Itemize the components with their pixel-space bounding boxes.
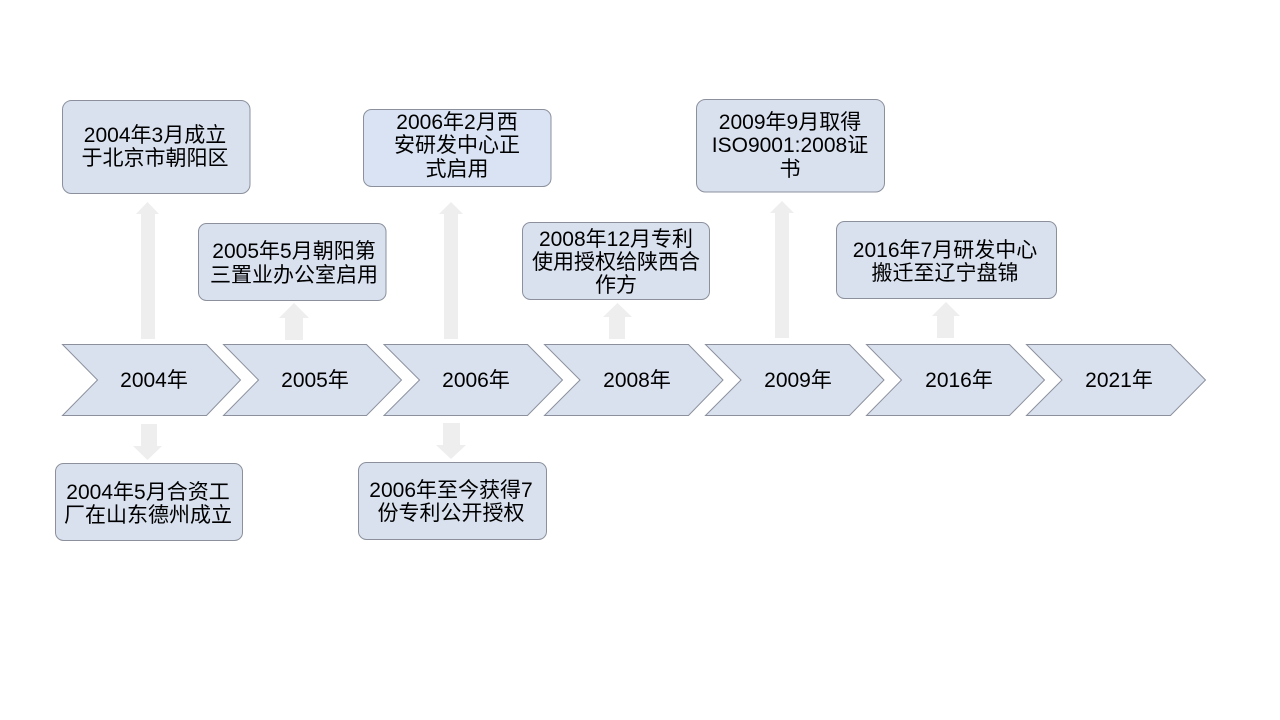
arrow: 2009 up [770,201,794,338]
chevron: 2006: 2006年 [442,369,510,392]
callout: 2004 March: 于北京市朝阳区 [82,147,228,170]
callout: 2006 February [364,110,551,186]
callout: 2006 patents [358,462,546,540]
callout: 2008 December: 2008年12月专利 [539,228,693,251]
callout: 2008 December [522,222,710,300]
callout: 2004 May [56,464,242,540]
arrow: 2005 up [279,303,309,340]
callout: 2005 May: 2005年5月朝阳第 [212,240,376,263]
callout: 2005 May: 三置业办公室启用 [210,264,378,287]
callout: 2006 February: 式启用 [426,158,488,181]
chevron: 2021 [1026,344,1206,416]
chevron: 2009 [706,344,884,416]
chevron: 2008: 2008年 [603,369,671,392]
chevron: 2005 [224,344,402,416]
arrow: 2004 up [136,202,159,339]
chevron: 2005: 2005年 [281,369,349,392]
callout: 2009 September: ISO9001:2008证 [712,134,868,157]
callout: 2004 March: 2004年3月成立 [84,124,226,147]
callout: 2004 May: 厂在山东德州成立 [64,504,232,527]
callout: 2006 February: 2006年2月西 [396,111,518,134]
chevron: 2021: 2021年 [1085,369,1153,392]
chevron: 2008 [544,344,723,416]
callout: 2016 July: 2016年7月研发中心 [853,239,1037,262]
callout: 2005 May [198,224,386,300]
callout: 2009 September [696,100,884,192]
chevron: 2016 [866,344,1044,416]
callout: 2006 February: 安研发中心正 [394,134,520,157]
arrow: 2016 up [932,302,960,338]
arrow: 2006 up [439,202,463,339]
callout: 2004 May: 2004年5月合资工 [66,481,230,504]
chevron: 2004: 2004年 [120,369,188,392]
chevron: 2016: 2016年 [925,369,993,392]
callout: 2006 patents: 份专利公开授权 [378,502,524,525]
callout: 2008 December: 作方 [595,274,637,297]
callout: 2016 July [836,222,1056,298]
callout: 2009 September: 书 [780,158,800,181]
callout: 2004 March [62,100,250,194]
callout: 2006 patents: 2006年至今获得7 [369,479,533,502]
chevron: 2006 [384,344,562,416]
chevron: 2009: 2009年 [764,369,832,392]
arrow: 2008 up [603,303,632,339]
callout: 2008 December: 使用授权给陕西合 [532,251,700,274]
callout: 2009 September: 2009年9月取得 [719,111,861,134]
callout: 2016 July: 搬迁至辽宁盘锦 [872,262,1018,285]
arrow: 2006 down [436,423,466,459]
chevron: 2004 [62,344,240,416]
arrow: 2004 down [133,424,162,460]
